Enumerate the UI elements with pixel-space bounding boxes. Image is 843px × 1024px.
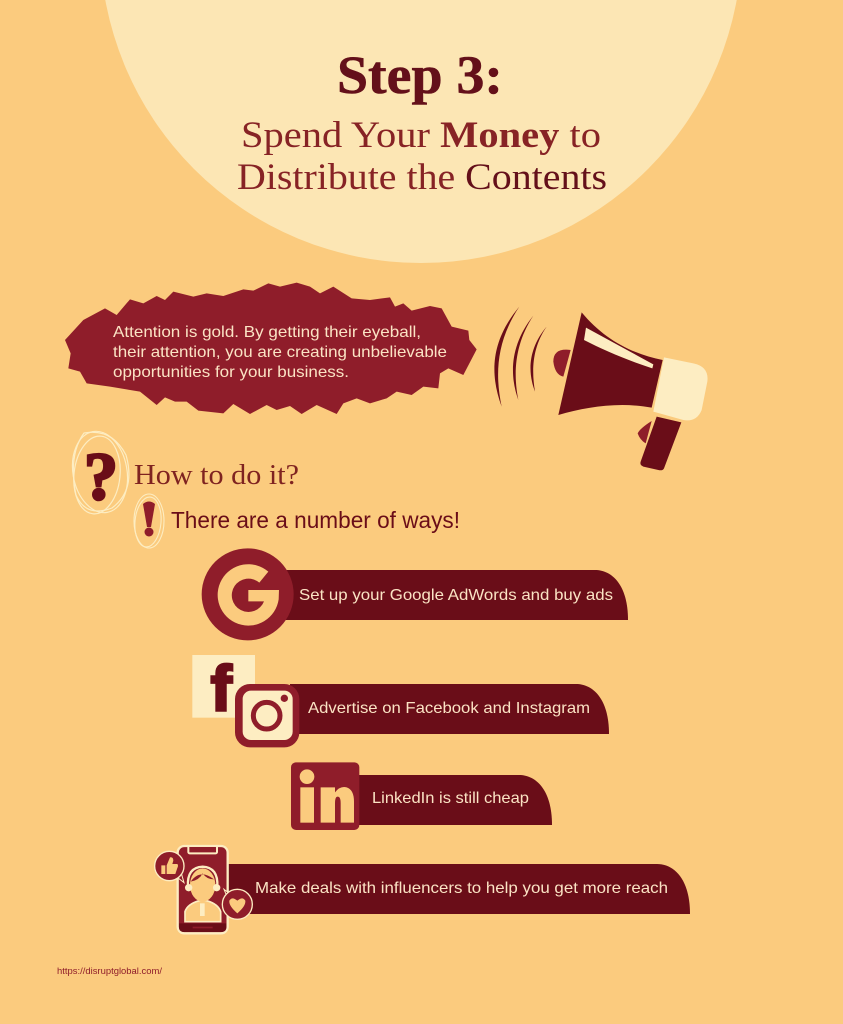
heading: how to do it: How to do it?: [134, 459, 299, 491]
title: [237, 45, 607, 198]
row: Google AdWords: Set up your Google AdWords and buy ads: [299, 587, 613, 604]
subheading: there are a number of ways: There are a number of ways!: [171, 507, 460, 533]
icon: Instagram: [235, 684, 299, 747]
title: Step 3:: [337, 45, 503, 105]
source link: https://disruptglobal.com/: [57, 966, 163, 976]
icon: question mark: [66, 427, 134, 517]
row: influencers: Make deals with influencers to help you get more reach: [255, 880, 668, 897]
icon: Facebook: [192, 653, 255, 725]
title: Distribute the Contents: [237, 157, 607, 198]
callout: attention is gold: Attention is gold. By getting their eyeball,: [113, 324, 421, 341]
icon: Google: [202, 548, 294, 640]
title: Spend Your Money to: [241, 115, 601, 156]
icon: exclamation mark: [133, 494, 164, 548]
icon: question mark: ?: [84, 438, 118, 514]
icon: influencer phone: [155, 846, 252, 933]
row: Facebook and Instagram: [192, 653, 609, 747]
icon: Facebook: f: [211, 653, 233, 725]
row: LinkedIn: LinkedIn is still cheap: [372, 790, 529, 807]
icon: megaphone: [494, 307, 708, 470]
row: LinkedIn: [291, 762, 552, 830]
row: Google AdWords: [202, 548, 628, 640]
row: influencers: [155, 846, 690, 933]
row: Facebook and Instagram: Advertise on Facebook and Instagram: [308, 700, 590, 717]
callout: attention is gold: [65, 283, 477, 414]
callout: attention is gold: opportunities for your business.: [113, 364, 349, 381]
header circle: [100, 0, 742, 263]
callout: attention is gold: their attention, you are creating unbelievable: [113, 344, 447, 361]
icon: LinkedIn: [291, 762, 359, 830]
